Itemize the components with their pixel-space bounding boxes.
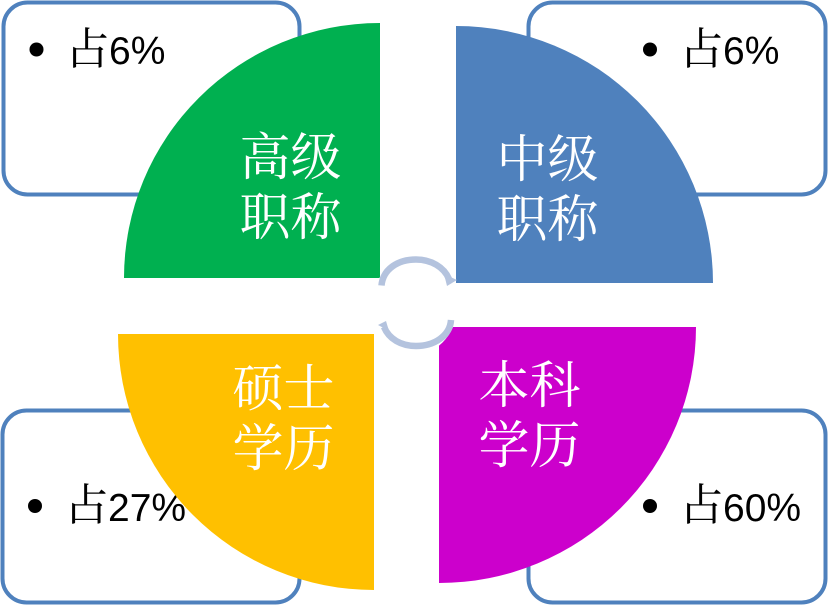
bullet: [643, 42, 657, 56]
arrow: top arc: [382, 260, 457, 286]
quadrant: 高级职称: [124, 23, 380, 278]
label: 中级职称: 职称: [496, 193, 600, 249]
text: 占60%: 占: [680, 481, 724, 530]
arrow: bottom arc: [378, 320, 451, 346]
text: 占6%: 6%: [109, 30, 165, 73]
panel: bottom-left share box: [2, 410, 300, 602]
text: 占27%: 占: [64, 481, 108, 530]
label: 高级职称: 职称: [240, 191, 343, 247]
label: 硕士学历: 学历: [232, 422, 335, 478]
text: 占6%: 6%: [723, 30, 779, 73]
panel: top-right share box: [528, 2, 826, 194]
bullet: [28, 499, 42, 513]
label: 本科学历: 本科: [478, 359, 581, 415]
center cycle arrows: [374, 252, 458, 354]
label: 本科学历: 学历: [478, 419, 581, 475]
text: 占27%: 27%: [108, 487, 186, 530]
text: 占6%: 占: [680, 25, 724, 74]
text: 占6%: 占: [66, 25, 110, 74]
panel: bottom-right share box: [528, 410, 826, 602]
label: 中级职称: 中级: [496, 133, 599, 189]
panel: top-left share box: [4, 2, 300, 194]
text: 占60%: 60%: [723, 487, 801, 530]
bullet: [643, 499, 657, 513]
label: 高级职称: 高级: [240, 131, 342, 187]
quadrant: 中级职称: [456, 26, 713, 283]
label: 硕士学历: 硕士: [232, 362, 335, 418]
bullet: [30, 42, 44, 56]
quadrant: 本科学历: [439, 327, 696, 583]
quadrant: 硕士学历: [118, 334, 374, 590]
